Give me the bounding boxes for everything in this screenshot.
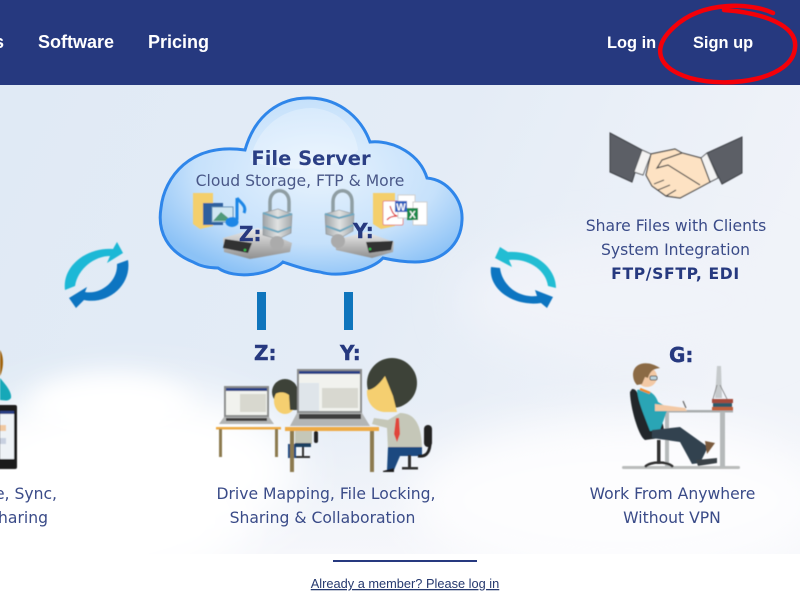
small desk (216, 427, 281, 457)
illustration: left partial person with tablet (0, 350, 17, 469)
drive label Y: Y: (339, 341, 361, 365)
monitor and books (712, 366, 733, 410)
person (633, 363, 717, 466)
text: drive mapping: Sharing & Collaboration (230, 509, 415, 527)
navigation bar: Software (38, 32, 114, 52)
text: drive mapping: Drive Mapping, File Locking, (216, 485, 436, 503)
red hand-drawn circle around sign up (660, 6, 795, 82)
illustration: person working at desk (622, 363, 740, 469)
subheading: Cloud Storage, FTP & More (196, 172, 404, 190)
drive label Z: Z: (254, 341, 276, 365)
illustration: two people at laptops (216, 358, 432, 472)
icon: documents folder: X (409, 210, 416, 221)
text: sync and sharing (0, 485, 57, 527)
footer divider (333, 560, 477, 562)
icon: media folder (193, 193, 245, 229)
footer link: Already a member? Please log in (311, 576, 499, 591)
cloud shape (160, 98, 462, 275)
icon: left sync arrows (65, 242, 128, 308)
cloud: file server (160, 98, 462, 275)
navigation bar: Sign up (693, 34, 753, 52)
text: share files: Share Files with Clients (586, 217, 766, 235)
navigation bar: Log in (607, 34, 656, 52)
text: work from anywhere (590, 485, 755, 527)
text: share files: FTP/SFTP, EDI (611, 265, 740, 283)
navigation bar (0, 0, 800, 85)
connector bar Y (344, 292, 353, 330)
icon: right sync arrows (491, 247, 556, 308)
big desk (285, 427, 379, 472)
desk (657, 410, 733, 467)
heading: File Server (251, 147, 371, 170)
big person (367, 358, 432, 472)
floor (622, 466, 740, 469)
connector bar Z (257, 292, 266, 330)
text: work from anywhere: Without VPN (623, 509, 721, 527)
icon: padlock drive Z (223, 191, 292, 259)
drive label G: G: (669, 343, 693, 367)
icon: documents folder: W (396, 202, 406, 214)
small laptop (219, 386, 274, 424)
icon: handshake (610, 133, 742, 198)
icon: documents folder (373, 193, 427, 229)
text: share files: System Integration (601, 241, 750, 259)
small person (272, 379, 318, 458)
text: work from anywhere: Work From Anywhere (590, 485, 755, 503)
navigation bar: Pricing (148, 32, 209, 52)
cloud highlight (250, 108, 358, 169)
drive letter Y in cloud: Y: (352, 219, 374, 243)
big laptop (290, 369, 370, 426)
drive letter Z in cloud: Z: (239, 222, 262, 246)
text: drive mapping (216, 485, 436, 527)
icon: padlock drive Y (325, 191, 394, 258)
chair (630, 389, 673, 467)
text: share files (586, 217, 766, 283)
